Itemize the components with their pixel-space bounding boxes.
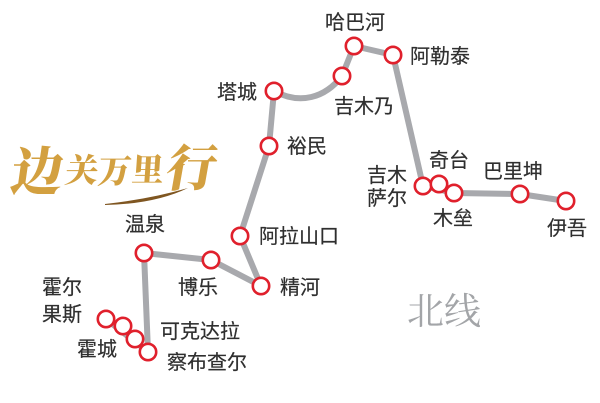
station labels: 萨尔 xyxy=(367,187,407,210)
route line xyxy=(106,46,566,352)
station labels: 巴里坤 xyxy=(483,160,543,183)
section label: 北线: 北线 xyxy=(407,291,481,333)
station labels: 果斯 xyxy=(42,303,82,326)
station labels: 博乐 xyxy=(178,276,218,299)
title: calligraphy 边关万里行: 行 xyxy=(162,141,222,197)
station labels: 温泉 xyxy=(125,213,165,236)
title: calligraphy 边关万里行: 里 xyxy=(131,152,165,188)
station labels: 吉木 xyxy=(367,164,407,187)
station labels: 霍城 xyxy=(77,338,117,361)
station labels: 霍尔 xyxy=(42,276,82,299)
station labels: 可克达拉 xyxy=(160,320,240,343)
station markers xyxy=(98,38,574,360)
station labels: 察布查尔 xyxy=(167,351,247,374)
station labels: 哈巴河 xyxy=(325,11,385,34)
station labels: 吉木乃 xyxy=(334,95,394,118)
station labels: 裕民 xyxy=(287,135,327,158)
station labels: 伊吾 xyxy=(547,217,587,240)
title: calligraphy 边关万里行 xyxy=(7,141,222,205)
station labels: 阿拉山口 xyxy=(259,225,339,248)
station labels: 奇台 xyxy=(429,149,469,172)
station labels: 木垒 xyxy=(433,207,473,230)
station labels: 精河 xyxy=(280,276,320,299)
station labels: 塔城 xyxy=(217,81,257,104)
title: calligraphy 边关万里行: 万 xyxy=(96,154,133,191)
title: calligraphy 边关万里行: 边 xyxy=(7,144,67,202)
station labels: 阿勒泰 xyxy=(410,45,470,68)
title: calligraphy 边关万里行: 关 xyxy=(63,153,101,190)
